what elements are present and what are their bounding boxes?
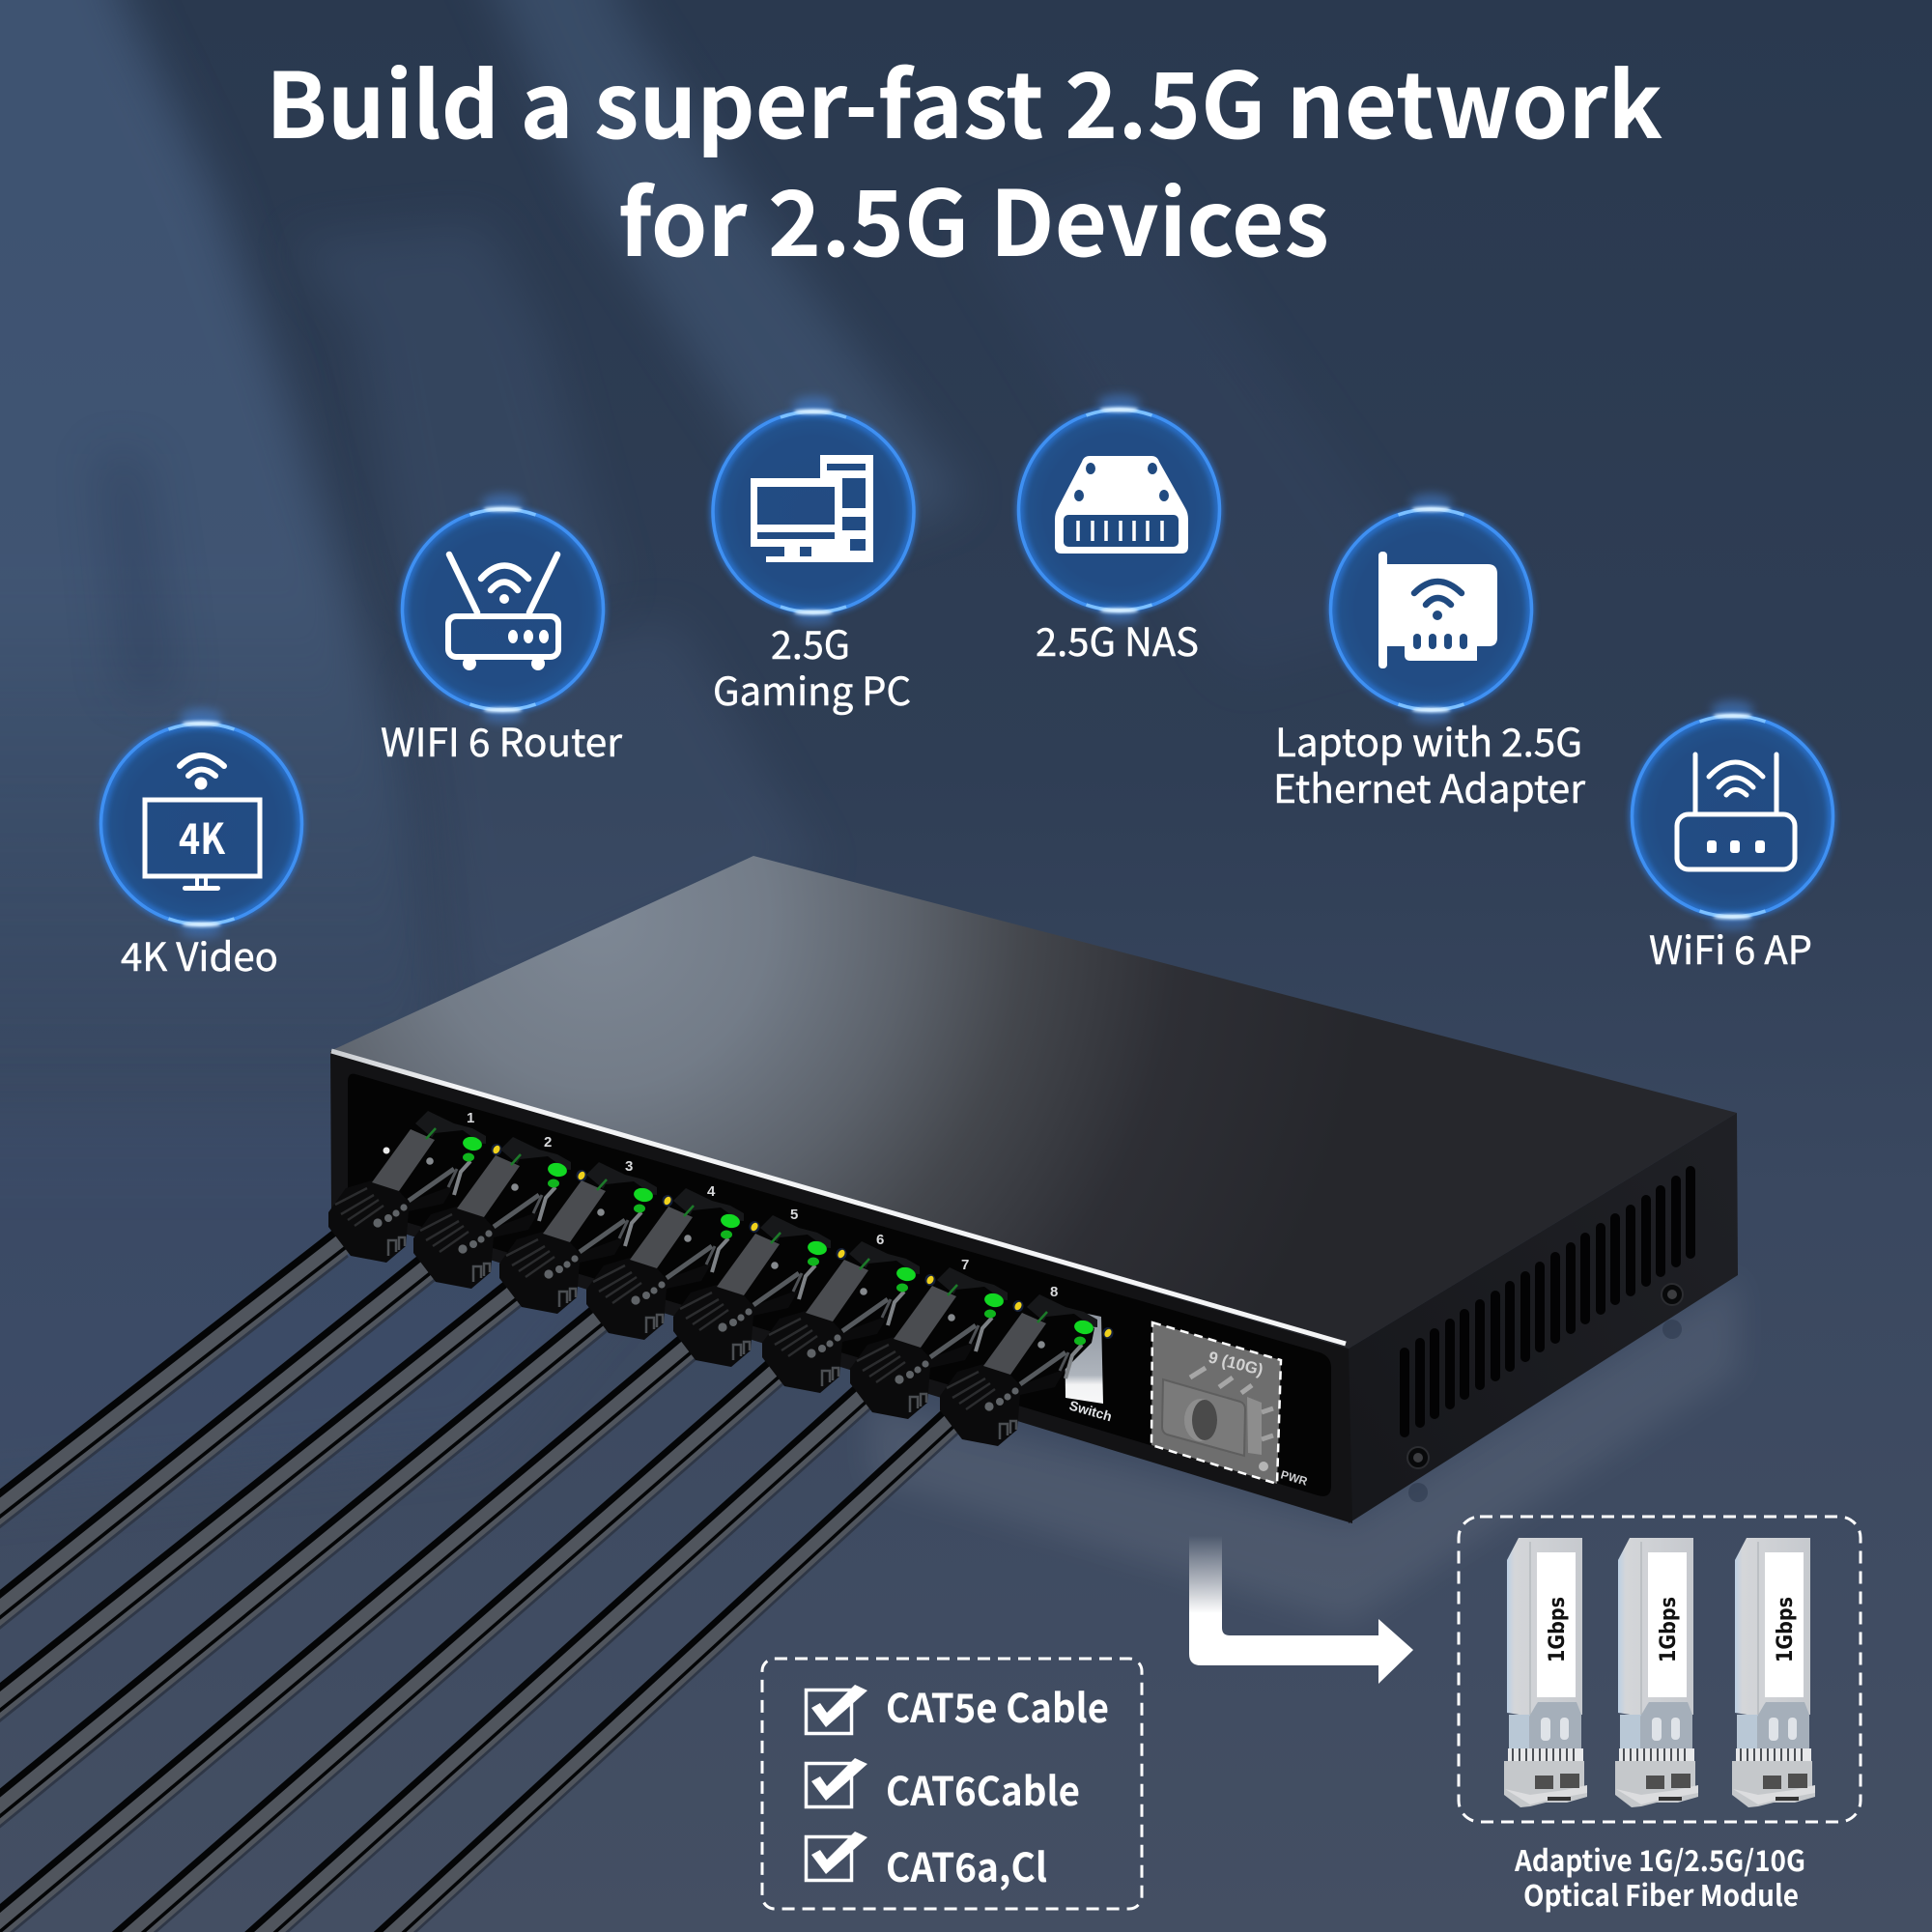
- switch side face with vents: [1349, 1113, 1738, 1523]
- PWR label: PWR: [1279, 1467, 1309, 1489]
- SFP module 1: [1504, 1538, 1587, 1807]
- icon: desktop PC: [751, 455, 873, 562]
- CAT6a item: CAT6a,Cl: [886, 1835, 1047, 1893]
- arrow: [1189, 1536, 1413, 1684]
- port numbers: 5: [790, 1207, 798, 1223]
- front top edge highlight: [331, 1051, 1346, 1344]
- device: laptop with 2.5G ethernet adapter: [1273, 494, 1585, 814]
- label: [1273, 712, 1585, 814]
- device: 2.5G gaming PC: [713, 396, 914, 717]
- cable 3: [0, 1271, 523, 1736]
- SFP module 3: [1732, 1538, 1815, 1807]
- device: WiFi 6 AP: [1633, 700, 1833, 976]
- title: [266, 34, 1662, 283]
- SFP port window: 9 (10G): [1207, 1348, 1265, 1379]
- cable 1: [0, 1223, 348, 1542]
- cable 8: [323, 1400, 958, 1932]
- icon: NAS drive: [1055, 456, 1188, 554]
- SFP port window: [1151, 1322, 1281, 1484]
- label: [713, 614, 911, 717]
- switch front face: [330, 1051, 1352, 1523]
- switch top face: [330, 856, 1737, 1349]
- icon: access point: [1677, 754, 1795, 869]
- CAT6a item: [806, 1832, 1047, 1893]
- device: 2.5G NAS: [1018, 394, 1219, 668]
- label: 2.5G NAS: [1036, 611, 1199, 668]
- icon: router: [448, 554, 558, 670]
- ethernet plugs and port LEDs: [328, 1111, 1113, 1446]
- cable 5: [0, 1324, 697, 1932]
- optical module caption: [1514, 1837, 1805, 1915]
- cable 4: [0, 1296, 609, 1842]
- port numbers: 4: [707, 1183, 716, 1200]
- device: 4K video: [100, 708, 301, 982]
- title: Build a super-fast 2.5G network: [266, 34, 1662, 165]
- label: Ethernet Adapter: [1273, 758, 1585, 814]
- switch label text: Switch: [1067, 1398, 1114, 1424]
- port numbers: 2: [544, 1134, 552, 1151]
- ethernet cables: [0, 1223, 958, 1932]
- label: Laptop with 2.5G: [1275, 712, 1582, 768]
- label: WiFi 6 AP: [1649, 920, 1812, 976]
- network switch: [330, 856, 1738, 1523]
- screw reflections: [1408, 1320, 1682, 1502]
- port numbers: 3: [625, 1158, 633, 1175]
- cable 2: [0, 1246, 436, 1643]
- port numbers: 7: [961, 1257, 969, 1273]
- SFP module 2: 1Gbps: [1657, 1597, 1681, 1662]
- SFP module 2: [1615, 1538, 1698, 1807]
- CAT5e item: CAT5e Cable: [886, 1676, 1109, 1734]
- CAT6 item: CAT6Cable: [886, 1759, 1080, 1817]
- label: WIFI 6 Router: [381, 712, 622, 768]
- icon: 4K monitor with wifi: 4K: [179, 805, 226, 867]
- icon: 4K monitor with wifi: [145, 755, 260, 891]
- SFP module 3: 1Gbps: [1774, 1597, 1798, 1662]
- CAT6 item: [806, 1758, 1080, 1817]
- label: Gaming PC: [713, 661, 911, 717]
- panel: supported cables: [762, 1659, 1142, 1909]
- front panel inset: [348, 1074, 1331, 1496]
- label: 2.5G: [771, 614, 850, 670]
- panel: optical modules: [1459, 1517, 1861, 1822]
- port numbers: 6: [876, 1232, 884, 1248]
- port numbers: [467, 1110, 1058, 1300]
- optical module caption: Optical Fiber Module: [1523, 1872, 1799, 1915]
- port numbers: 8: [1050, 1284, 1058, 1300]
- optical module caption: Adaptive 1G/2.5G/10G: [1514, 1837, 1805, 1880]
- title: for 2.5G Devices: [618, 152, 1329, 283]
- port 8 silver cage: [1065, 1309, 1103, 1404]
- icon: network card: [1378, 552, 1497, 668]
- port numbers: 1: [467, 1110, 474, 1126]
- label: 4K Video: [121, 926, 278, 982]
- SFP module 1: 1Gbps: [1546, 1597, 1570, 1662]
- cable 7: [192, 1375, 871, 1932]
- device: WiFi 6 router: [381, 494, 622, 768]
- cable 6: [58, 1350, 784, 1932]
- power LED dot: [383, 1148, 390, 1153]
